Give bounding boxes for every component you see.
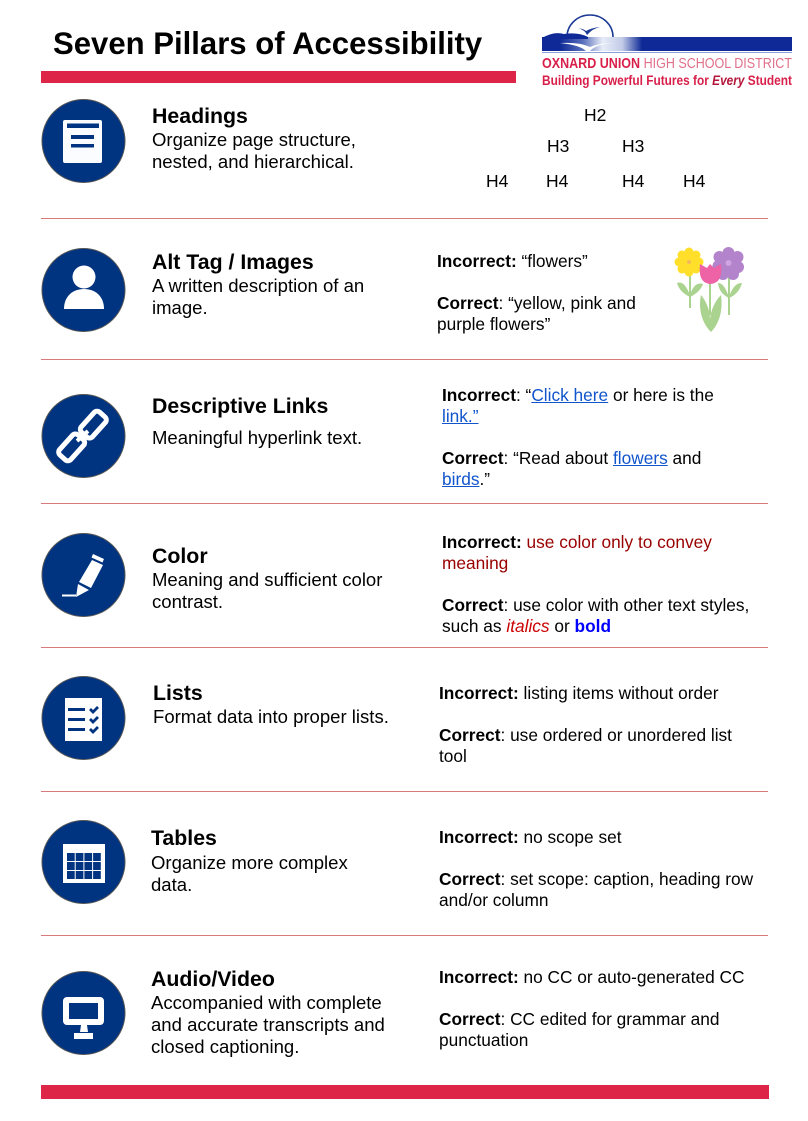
description bbox=[151, 852, 348, 895]
example text bbox=[442, 385, 714, 489]
example text: Correct: “yellow, pink and bbox=[437, 293, 636, 313]
icon: flowers bbox=[674, 247, 744, 332]
logo: Oxnard Union High School District bbox=[542, 14, 792, 88]
description: nested, and hierarchical. bbox=[152, 151, 354, 172]
icon: marker pen bbox=[42, 533, 126, 617]
heading: Alt Tag / Images bbox=[152, 250, 314, 274]
description: contrast. bbox=[152, 591, 223, 612]
example text bbox=[442, 532, 749, 636]
icon: table grid bbox=[42, 820, 126, 904]
description: A written description of an bbox=[152, 275, 364, 296]
heading: Color bbox=[152, 544, 208, 568]
description: Accompanied with complete bbox=[151, 992, 382, 1013]
heading hierarchy example: H2 bbox=[584, 105, 606, 125]
example text: Incorrect: “flowers” bbox=[437, 251, 588, 271]
description: data. bbox=[151, 874, 192, 895]
heading: Descriptive Links bbox=[152, 394, 328, 418]
logo: Oxnard Union High School District: Building Powerful Futures for Every Student bbox=[542, 72, 792, 88]
example text: Incorrect: no CC or auto-generated CC bbox=[439, 967, 744, 987]
panel: color bbox=[42, 532, 749, 636]
example text: Correct: use color with other text styles, bbox=[442, 595, 749, 615]
example text: Incorrect: use color only to convey bbox=[442, 532, 712, 552]
bottom red bar bbox=[41, 1085, 769, 1099]
panel: lists bbox=[42, 676, 732, 766]
panel: alt tag images bbox=[42, 247, 744, 334]
description bbox=[151, 992, 385, 1057]
title: Seven Pillars of Accessibility bbox=[53, 26, 482, 61]
example text bbox=[439, 967, 744, 1050]
description: Meaningful hyperlink text. bbox=[152, 427, 362, 448]
example text: birds.” bbox=[442, 469, 490, 489]
heading hierarchy example: H4 bbox=[486, 171, 508, 191]
description bbox=[152, 569, 382, 612]
example text: Incorrect: “Click here or here is the bbox=[442, 385, 714, 405]
panel: audio video bbox=[42, 967, 744, 1057]
example text bbox=[437, 251, 636, 334]
description: Format data into proper lists. bbox=[153, 706, 389, 727]
heading hierarchy example: H4 bbox=[622, 171, 644, 191]
description: image. bbox=[152, 297, 208, 318]
top red bar bbox=[41, 71, 516, 83]
example text: and/or column bbox=[439, 890, 549, 910]
example text: link.” bbox=[442, 406, 478, 426]
example text: Incorrect: no scope set bbox=[439, 827, 622, 847]
example text: Correct: “Read about flowers and bbox=[442, 448, 701, 468]
heading hierarchy example: H4 bbox=[546, 171, 568, 191]
description bbox=[152, 275, 364, 318]
heading: Lists bbox=[153, 681, 203, 705]
icon: person bbox=[42, 248, 126, 332]
panel: headings bbox=[42, 99, 705, 191]
description: Organize more complex bbox=[151, 852, 348, 873]
example text bbox=[439, 827, 754, 910]
heading hierarchy example: H3 bbox=[547, 136, 569, 156]
heading: Audio/Video bbox=[151, 967, 275, 991]
example text bbox=[439, 683, 732, 766]
heading: Headings bbox=[152, 104, 248, 128]
heading hierarchy example bbox=[486, 105, 705, 191]
example text: tool bbox=[439, 746, 467, 766]
heading hierarchy example: H4 bbox=[683, 171, 705, 191]
description bbox=[152, 129, 356, 172]
example text: meaning bbox=[442, 553, 508, 573]
icon: checklist bbox=[42, 676, 126, 760]
example text: such as italics or bold bbox=[442, 616, 611, 636]
example text: Correct: set scope: caption, heading row bbox=[439, 869, 753, 889]
description: Meaning and sufficient color bbox=[152, 569, 382, 590]
description: and accurate transcripts and bbox=[151, 1014, 385, 1035]
panel: tables bbox=[42, 820, 754, 910]
description: closed captioning. bbox=[151, 1036, 299, 1057]
heading hierarchy example: H3 bbox=[622, 136, 644, 156]
heading: Tables bbox=[151, 826, 217, 850]
example text: punctuation bbox=[439, 1030, 528, 1050]
icon: monitor bbox=[42, 971, 126, 1055]
panel: descriptive links bbox=[42, 385, 714, 489]
icon: chain link bbox=[42, 394, 126, 478]
description: Organize page structure, bbox=[152, 129, 356, 150]
example text: purple flowers” bbox=[437, 314, 550, 334]
example text: Correct: use ordered or unordered list bbox=[439, 725, 732, 745]
example text: Incorrect: listing items without order bbox=[439, 683, 718, 703]
icon: document bbox=[42, 99, 126, 183]
example text: Correct: CC edited for grammar and bbox=[439, 1009, 719, 1029]
